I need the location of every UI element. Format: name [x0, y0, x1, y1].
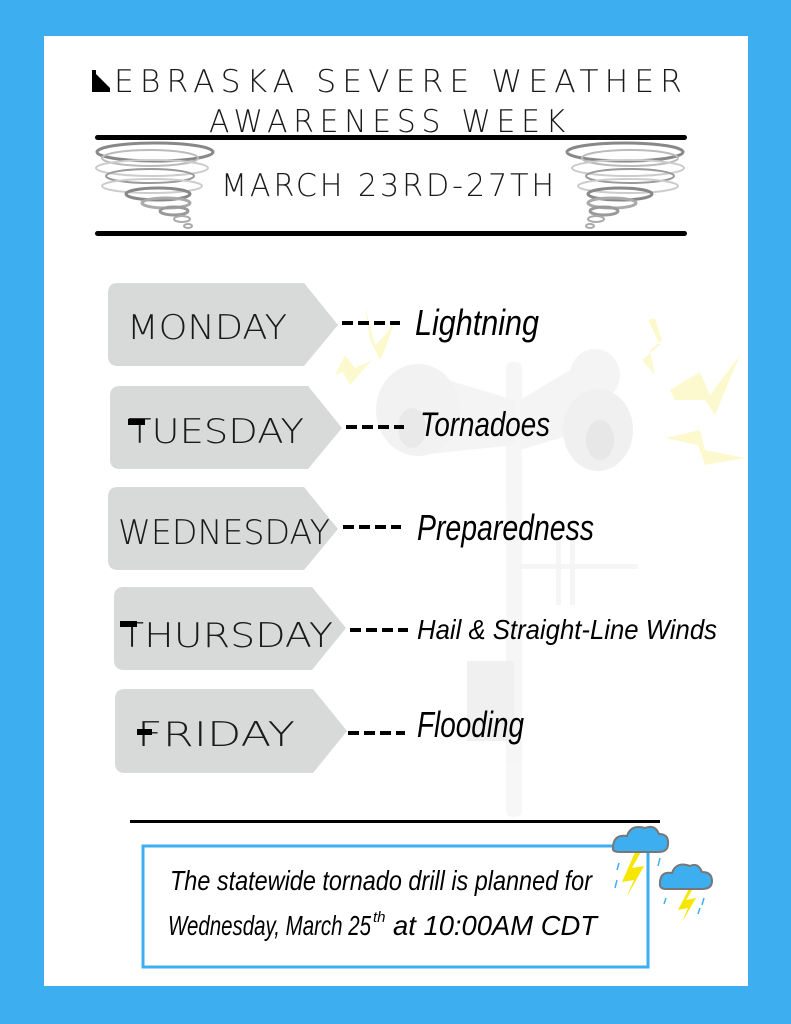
callout: tornado drill: at 10:00AM CDT: [393, 910, 599, 941]
icon: storm clouds: [613, 827, 712, 922]
tag: Wednesday: Preparedness: [417, 507, 594, 548]
icon: tornado right: [567, 143, 684, 228]
tag: Friday: FRIDAY: [137, 715, 295, 755]
date subtitle: MARCH 23RD-27TH: [221, 168, 557, 204]
tag: Wednesday: WEDNESDAY: [118, 513, 330, 553]
callout: tornado drill: Wednesday, March 25: [168, 910, 371, 941]
tag: Monday: Lightning: [415, 302, 539, 343]
callout: tornado drill: th: [373, 909, 386, 926]
callout: tornado drill: The statewide tornado drill is planned for: [170, 865, 593, 896]
tag: Tuesday: Tornadoes: [420, 406, 550, 444]
tag: Thursday: [114, 587, 717, 670]
divider line: [130, 820, 660, 823]
background illustration: siren and lightning: [335, 305, 745, 817]
header bars: [95, 135, 687, 140]
tag: Thursday: Hail & Straight-Line Winds: [417, 614, 717, 645]
tag: Monday: [108, 283, 539, 366]
tag: Thursday: THURSDAY: [120, 616, 333, 656]
tag: Tuesday: [110, 386, 550, 469]
icon: tornado left: [96, 143, 213, 228]
tag: Friday: Flooding: [417, 704, 524, 745]
tag: Wednesday: [108, 487, 594, 570]
tag: Tuesday: TUESDAY: [128, 412, 304, 452]
tag: Monday: MONDAY: [127, 308, 287, 348]
tag: Friday: [115, 689, 524, 773]
title: [92, 64, 688, 140]
title: EBRASKA SEVERE WEATHER: [114, 64, 688, 100]
callout: tornado drill: [143, 846, 648, 967]
title: AWARENESS WEEK: [209, 104, 571, 140]
